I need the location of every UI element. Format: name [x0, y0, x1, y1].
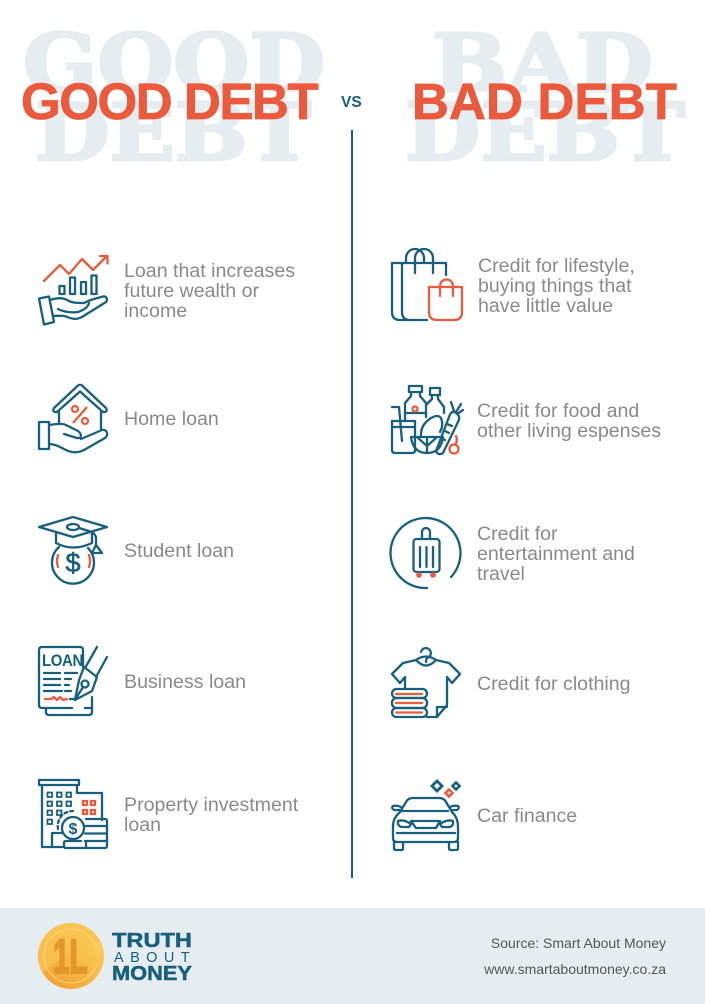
- item: credit for entertainment and travel: [390, 518, 635, 588]
- text: Car finance: [477, 805, 577, 827]
- text: Property investment: [124, 794, 299, 816]
- ghost background text: bad debt: [405, 16, 685, 179]
- icon: gold coin: 1L: [53, 931, 88, 984]
- item: home loan: [39, 385, 219, 452]
- source credit: Source: Smart About Money: [491, 935, 666, 951]
- text: income: [124, 300, 187, 322]
- icon: graduation cap and dollar coin: [39, 517, 107, 584]
- logo wordmark: [112, 929, 196, 985]
- icon: gold coin: [38, 923, 104, 989]
- text: entertainment and: [477, 543, 635, 565]
- ghost background text: good debt: GOOD: [23, 15, 325, 110]
- text: future wealth or: [124, 280, 260, 302]
- title: bad debt: BAD DEBT: [412, 73, 677, 130]
- icon: shopping bags: [392, 249, 462, 320]
- text: other living espenses: [477, 420, 661, 442]
- title: good debt: GOOD DEBT: [21, 73, 318, 130]
- ghost background text: bad debt: BAD: [432, 16, 653, 110]
- item: property investment loan: [39, 780, 299, 848]
- item: credit for lifestyle: [392, 249, 635, 320]
- heading: good debt: [21, 15, 325, 179]
- icon: car with sparkles: [392, 781, 460, 850]
- text: [477, 523, 635, 585]
- text: [124, 260, 295, 322]
- logo wordmark: ABOUT: [114, 950, 196, 966]
- text: loan: [124, 814, 161, 836]
- text: Credit for food and: [477, 400, 639, 422]
- text: Home loan: [124, 408, 219, 430]
- icon: buildings and coins: [39, 780, 107, 848]
- logo: truth about money: [38, 923, 196, 989]
- text: Student loan: [124, 540, 234, 562]
- item: credit for clothing: [392, 648, 631, 717]
- source credit: www.smartaboutmoney.co.za: [483, 961, 666, 977]
- source credit: [483, 935, 666, 977]
- icon: suitcase in circle: [390, 518, 460, 588]
- logo wordmark: MONEY: [112, 963, 192, 985]
- item: loan that increases future wealth or income: [39, 256, 295, 324]
- ghost background text: bad debt: DEBT: [405, 85, 685, 179]
- text: Credit for: [477, 523, 558, 545]
- item: business loan: [39, 647, 246, 715]
- ghost background text: good debt: DEBT: [35, 85, 311, 179]
- text: Loan that increases: [124, 260, 295, 282]
- vs label: VS: [341, 94, 362, 111]
- footer band: [0, 908, 705, 1004]
- icon: growth chart on hand: [39, 256, 108, 324]
- icon: groceries: [392, 386, 463, 454]
- icon: loan document and pen: LOAN: [42, 652, 83, 670]
- ghost background text: good debt: [23, 15, 325, 179]
- text: Credit for clothing: [477, 673, 631, 695]
- text: Business loan: [124, 671, 246, 693]
- text: [124, 794, 299, 836]
- text: Credit for lifestyle,: [478, 255, 635, 277]
- text: buying things that: [478, 275, 632, 297]
- text: [478, 255, 635, 317]
- item: student loan: [39, 517, 234, 584]
- icon: loan document and pen: [39, 647, 107, 715]
- icon: graduation cap and dollar coin: $: [65, 548, 81, 578]
- item: car finance: [392, 781, 577, 850]
- icon: buildings and coins: $: [69, 821, 78, 838]
- text: travel: [477, 563, 525, 585]
- heading: bad debt: [405, 16, 685, 179]
- icon: house on hand: [39, 385, 107, 452]
- center divider line: [351, 130, 353, 878]
- icon: shirt on hanger with folded clothes: [392, 648, 460, 717]
- text: [477, 400, 661, 442]
- text: have little value: [478, 295, 613, 317]
- item: credit for food: [392, 386, 661, 454]
- logo wordmark: TRUTH: [112, 929, 192, 952]
